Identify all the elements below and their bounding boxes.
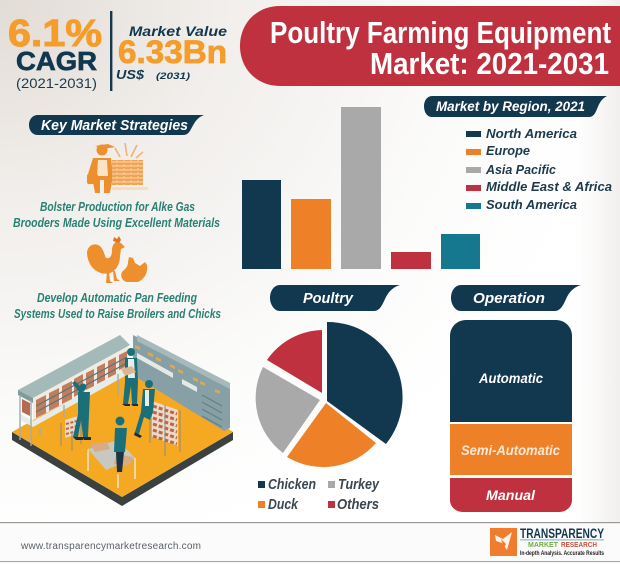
segment: semi-automatic: Semi-Automatic (461, 442, 560, 458)
worker at table (114, 416, 127, 472)
legend: poultry: Chicken (268, 477, 316, 493)
heading: operation (451, 285, 581, 311)
logo: transparency market research: MARKET (528, 542, 559, 549)
website url: www.transparencymarketresearch.com (20, 541, 201, 552)
logo mark (490, 528, 517, 556)
logo: transparency market research (490, 526, 604, 557)
icon: farmer with brick brooder (87, 143, 148, 193)
segment: automatic: Automatic (478, 370, 543, 386)
bar chart: market by region (242, 107, 480, 269)
legend: region: Europe (486, 143, 530, 158)
illustration: poultry farm room (12, 335, 233, 506)
footer band (0, 523, 620, 564)
market value stat: (2031) (156, 71, 190, 82)
legend: region: Asia Pacific (485, 162, 557, 177)
legend: region: Middle East & Africa (486, 179, 612, 194)
strategy text 1: Brooders Made Using Excellent Materials (13, 215, 220, 230)
sorting table (88, 440, 135, 488)
CAGR stat: CAGR (16, 46, 97, 76)
right cabinets (133, 335, 230, 431)
market value stat: 6.33Bn (118, 34, 227, 70)
legend: poultry: Others (337, 497, 379, 513)
heading: key market strategies: Key Market Strategies (41, 118, 188, 134)
market value stat: US$ (116, 67, 145, 82)
market value stat: Market Value (129, 23, 227, 39)
footer top rule (0, 522, 620, 523)
legend: region (466, 126, 612, 212)
CAGR stat: (2021-2031) (16, 75, 97, 91)
worker with tray (121, 348, 138, 406)
heading: poultry (270, 285, 400, 311)
bird rack (150, 399, 180, 456)
legend: poultry (258, 477, 380, 513)
heading: market by region (424, 96, 607, 117)
legend: poultry: Duck (268, 497, 299, 513)
strategy text 2 (14, 290, 221, 321)
worker at rack (134, 380, 155, 438)
strategy text 2: Develop Automatic Pan Feeding (37, 290, 197, 305)
icon: rooster and hen (87, 236, 147, 283)
market value stat (116, 23, 227, 82)
logo: transparency market research: RESEARCH (561, 542, 597, 549)
CAGR stat: 6.1% (8, 13, 102, 55)
pie chart: poultry (256, 322, 403, 467)
stacked column: operation (450, 320, 572, 512)
floor (12, 364, 233, 506)
CAGR stat (8, 13, 102, 91)
segment: manual (450, 478, 572, 512)
heading: operation: Operation (473, 290, 545, 307)
segment: automatic (450, 320, 572, 422)
left shelving (18, 335, 130, 446)
heading: poultry: Poultry (303, 290, 354, 307)
legend: poultry: Turkey (338, 477, 380, 493)
worker at shelf (72, 381, 91, 440)
legend: region: South America (486, 197, 577, 212)
segment: manual: Manual (486, 487, 536, 503)
strategy text 1 (13, 199, 220, 230)
heading: key market strategies (29, 115, 204, 135)
divider (110, 11, 112, 91)
title banner (240, 6, 620, 86)
footer bottom rule (0, 561, 620, 562)
small bird rack (61, 416, 81, 451)
segment: semi-automatic (450, 424, 572, 475)
heading: market by region: Market by Region, 2021 (436, 99, 585, 114)
strategy text 2: Systems Used to Raise Broilers and Chicks (14, 306, 221, 321)
strategy text 1: Bolster Production for Alke Gas (40, 199, 195, 214)
legend: region: North America (486, 126, 577, 141)
